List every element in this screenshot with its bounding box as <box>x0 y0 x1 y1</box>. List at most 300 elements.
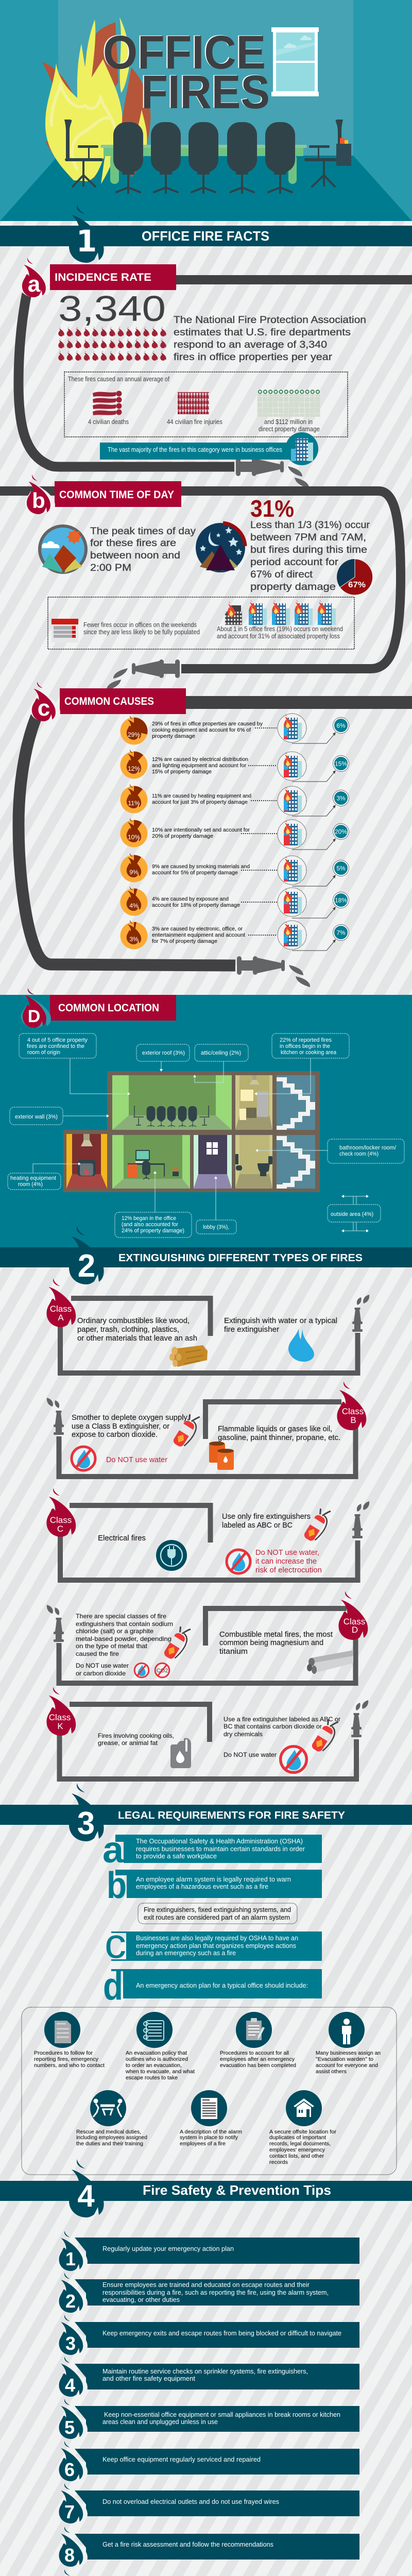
room: stairs lower <box>277 1135 315 1189</box>
room: conference <box>112 1075 232 1130</box>
title: OFFICE FIRES: FIRES <box>140 65 269 118</box>
flame badge class A <box>46 1278 76 1327</box>
room: heating equipment <box>66 1134 107 1189</box>
item: evacuation policy: An evacuation policy that <box>126 2050 187 2056</box>
text: peak times <box>90 526 196 573</box>
item: evacuation policy: escape routes to take <box>126 2075 178 2081</box>
nozzle class C <box>352 1501 369 1538</box>
tip 4: Maintain routine service checks on sprinkler systems, fire extinguishers, <box>102 2368 308 2375</box>
text: night fires: but fires during this time <box>250 545 367 555</box>
tip 3: 3 <box>65 2333 76 2354</box>
callout: outside area: outside area (4%) <box>331 1211 373 1217</box>
item: offsite location: contact lists, and other <box>269 2153 324 2159</box>
text: class B response: Smother to deplete oxygen supply, <box>72 1414 189 1422</box>
item: alarm description: system in place to notify <box>180 2134 238 2141</box>
text: weekend share: and account for 31% of associated property loss <box>217 633 340 640</box>
stat: 31%: 31% <box>250 495 294 522</box>
title: OFFICE FIRES: FIRES <box>141 66 270 118</box>
callout: exterior wall: exterior wall (3%) <box>15 1114 58 1120</box>
text: special extinguishers: caused the fire <box>76 1650 119 1657</box>
text: cooking oils: grease, or animal fat <box>98 1739 158 1747</box>
section number flame 1 <box>69 205 104 263</box>
cause row: exposure 4%: 4% are caused by exposure and <box>152 896 229 902</box>
callout: attic ceiling <box>195 1044 248 1061</box>
callout: outside area <box>328 1205 381 1222</box>
tip 2: responsibilities during a fire, such as reporting the fire, using the alarm system, <box>102 2289 329 2296</box>
item: evacuation warden: assist others <box>316 2069 347 2075</box>
flame badge class K <box>46 1687 76 1736</box>
cause row: electronic 3%: 3% are caused by electronic, office, or <box>152 926 243 932</box>
tip 5 <box>58 2399 359 2439</box>
cause row: electrical 12%: and lighting equipment and account for <box>152 762 247 769</box>
tip 1: Regularly update your emergency action plan <box>102 2245 234 2252</box>
text: class A response <box>224 1317 337 1334</box>
cause row: exposure 4%: 18% <box>335 896 347 904</box>
item: rescue duties: the duties and their training <box>76 2141 143 2147</box>
callout: business offices <box>100 432 318 465</box>
requirement d: An emergency action plan for a typical office should include: <box>136 1982 308 1989</box>
hose c <box>19 706 235 965</box>
tip 1: 1 <box>65 2248 76 2269</box>
panel: common causes <box>19 682 412 987</box>
banner: incidence rate <box>50 264 176 290</box>
item: reporting procedures: reporting fires, emergency <box>34 2056 99 2062</box>
flame badge class D: D <box>352 1625 358 1635</box>
text: night fires: 67% of direct <box>250 569 313 580</box>
flame badge b: b <box>32 488 45 513</box>
trash bin <box>336 138 351 166</box>
item: rescue duties: including employees assigned <box>76 2134 147 2141</box>
flame badge D: D <box>28 1007 40 1026</box>
requirement d: d <box>103 1964 123 2008</box>
text: fewer fires on weekends: since they are less likely to be fully populated <box>83 629 200 636</box>
callout: attic ceiling: attic/ceiling (2%) <box>201 1050 241 1056</box>
cause row: electrical 12%: 15% of property damage <box>152 769 212 775</box>
item: rescue duties <box>76 2090 147 2147</box>
callout: heating equipment room: heating equipment <box>10 1175 56 1181</box>
frame B <box>59 1402 355 1477</box>
icon: no water <box>134 1663 149 1677</box>
cause row: electronic 3%: 7% <box>336 929 346 937</box>
hose b <box>0 491 401 669</box>
icon: injuries grid <box>178 392 209 414</box>
text: class A response: fire extinguisher <box>224 1326 279 1334</box>
text: peak times: between noon and <box>90 550 180 561</box>
building cross-section <box>63 1071 320 1192</box>
requirement c: c <box>105 1920 126 1967</box>
item: alarm description: employees of a fire <box>180 2141 226 2147</box>
requirement b: b <box>107 1865 127 1906</box>
item: evacuation policy <box>125 2012 195 2081</box>
flame icon grid <box>58 327 166 361</box>
text: class B response <box>72 1414 189 1439</box>
banner: common time of day: COMMON TIME OF DAY <box>59 489 174 501</box>
tip 5: Keep non-essential office equipment or small appliances in break rooms or kitchen <box>104 2411 340 2418</box>
dashed note: alarm system: Fire extinguishers, fixed extinguishing systems, and <box>144 1906 291 1913</box>
nozzle class K <box>351 1700 368 1737</box>
cause row: cooking equipment 29%: cooking equipment and account for 6% of <box>152 727 251 733</box>
banner: common location <box>50 995 176 1021</box>
item: reporting procedures <box>34 2012 105 2069</box>
icon: no water <box>281 1747 306 1772</box>
text: special extinguishers: chloride (salt) or a graphite <box>76 1628 153 1635</box>
callout: exterior roof <box>136 1044 190 1061</box>
banner: incidence rate: INCIDENCE RATE <box>55 272 151 283</box>
item: offsite location: A secure offsite location for <box>269 2129 337 2135</box>
icon: barrels <box>209 1442 234 1470</box>
text: NFPA estimate: respond to an average of 3,340 <box>174 340 327 350</box>
cause row: heating 11%: 11% are caused by heating equipment and <box>152 793 251 799</box>
text: do not use water: Do NOT use water <box>224 1751 277 1758</box>
cause row: smoking 9%: 9% are caused by smoking materials and <box>152 863 250 870</box>
icon: extinguisher <box>311 1717 342 1755</box>
callout: lobby <box>196 1220 236 1234</box>
item: evacuation warden: "Evacuation warden" to <box>316 2056 373 2062</box>
cause row: electrical 12% <box>121 750 349 782</box>
flame badge class K: K <box>57 1721 63 1731</box>
dashed note: alarm system: exit routes are considered part of an alarm system <box>144 1913 290 1921</box>
item: evacuation warden <box>316 2012 381 2075</box>
text: peak times: for these fires are <box>90 538 176 549</box>
text: class B materials: Flammable liquids or gases like oil, <box>218 1425 332 1433</box>
flame badge class D: Class <box>344 1617 365 1626</box>
requirement c <box>105 1920 322 1967</box>
section number flame 3: 3 <box>77 1806 95 1841</box>
callout: room of origin <box>19 1033 96 1058</box>
text: night fires: Less than 1/3 (31%) occur <box>250 520 370 531</box>
conference chairs <box>64 120 343 194</box>
panel: incidence rate <box>19 258 412 488</box>
tip 7: Do not overload electrical outlets and do not use frayed wires <box>102 2498 279 2505</box>
requirement a <box>102 1829 322 1871</box>
cause row: intentional 10%: 20% <box>335 828 347 836</box>
callout: office: (and also accounted for <box>122 1222 178 1228</box>
text: do not use water or CO2: or carbon dioxide <box>76 1670 126 1677</box>
cause row: intentional 10%: 10% <box>128 834 140 841</box>
tip 6: Keep office equipment regularly serviced and repaired <box>102 2456 261 2463</box>
panel: common time of day <box>0 474 401 690</box>
room: office <box>112 1135 190 1189</box>
text: special extinguishers: metal-based powder, depending <box>76 1635 171 1642</box>
icon: daytime scene <box>40 526 86 573</box>
panel: class B <box>47 1381 366 1477</box>
text: class A materials <box>77 1317 197 1343</box>
flame badge class B <box>337 1381 366 1430</box>
requirement c: emergency action plan that organizes employee actions <box>136 1942 296 1950</box>
text: night fires: property damage <box>250 582 336 592</box>
flame badge c: c <box>38 696 50 721</box>
requirement b: employees of a hazardous event such as a fire <box>136 1883 268 1890</box>
panel: header office scene <box>0 0 412 221</box>
tip 2: Ensure employees are trained and educated on escape routes and their <box>102 2281 310 2289</box>
text: special extinguishers: on the type of metal that <box>76 1642 148 1650</box>
heading: fire safety tips: Fire Safety & Prevention Tips <box>143 2182 331 2198</box>
text: special extinguishers: extinguishers that contain sodium <box>76 1620 173 1628</box>
section number flame 4 <box>69 2159 104 2217</box>
cause row: heating 11%: 11% <box>128 800 140 807</box>
cause row: cooking equipment 29%: property damage <box>152 733 195 739</box>
banner: common location: COMMON LOCATION <box>58 1002 159 1014</box>
flame badge class C <box>46 1488 76 1537</box>
stat: 3,340: 3,340 <box>58 289 166 329</box>
dotted box: weekends <box>48 597 354 649</box>
tip 3: Keep emergency exits and escape routes from being blocked or difficult to navigate <box>102 2330 341 2337</box>
section number flame 2: 2 <box>78 1248 95 1284</box>
text: class K response: BC that contains carbon dioxide or <box>224 1723 322 1730</box>
cause row: cooking equipment 29%: 29% <box>128 731 140 738</box>
text: class B response: use a Class B extinguisher, or <box>72 1422 169 1431</box>
cause row: electronic 3%: entertainment equipment and account <box>152 932 245 938</box>
cause row: electronic 3%: 3% <box>129 936 139 943</box>
item: offsite location: employees' emergency <box>269 2147 325 2153</box>
item: evacuation policy: when to evacuate, and what <box>125 2069 195 2075</box>
section number flame 1: 1 <box>76 224 97 259</box>
flame badge D <box>21 988 51 1028</box>
room: bathroom <box>235 1135 272 1189</box>
text: class B response: expose to carbon dioxide. <box>72 1431 158 1439</box>
cause row: exposure 4% <box>121 887 349 918</box>
text: night fires <box>250 520 370 592</box>
icon: night scene <box>196 523 245 572</box>
tip 9 <box>58 2569 359 2576</box>
text: class C response <box>222 1513 311 1530</box>
cause row: exposure 4%: account for 18% of property damage <box>152 902 240 908</box>
item: reporting procedures: numbers, and who to contact <box>34 2062 105 2069</box>
text: class A materials: Ordinary combustibles like wood, <box>77 1317 190 1325</box>
frame C <box>60 1505 357 1580</box>
warning: electrocution: risk of electrocution <box>255 1566 322 1574</box>
item: offsite location: records <box>269 2159 288 2165</box>
callout: room of origin: fires are confined to the <box>27 1043 84 1049</box>
nozzle class B <box>47 1398 64 1435</box>
icon: extinguisher <box>172 1412 203 1450</box>
item: rescue duties: Rescue and medical duties, <box>76 2129 141 2135</box>
stat labels: and $112 million in <box>264 418 313 426</box>
section number flame 4: 4 <box>77 2179 95 2213</box>
icon: extinguisher <box>303 1506 334 1544</box>
nozzle class A <box>352 1295 369 1332</box>
warning: electrocution: it can increase the <box>255 1557 317 1566</box>
stat labels: 44 civilian fire injuries <box>167 418 222 426</box>
text: class D materials: common being magnesium and <box>219 1639 323 1647</box>
cause row: cooking equipment 29%: 29% of fires in office properties are caused by <box>152 721 263 727</box>
flame badge class C: C <box>57 1524 63 1534</box>
flame badge class B: B <box>350 1415 356 1425</box>
cause row: smoking 9%: 5% <box>336 865 346 872</box>
icon: water drop <box>288 1329 314 1362</box>
callout: office: 12% began in the office <box>122 1215 176 1222</box>
dashed note: alarm system <box>138 1903 297 1924</box>
icon: logs <box>169 1345 208 1367</box>
callout: lobby: lobby (3%), <box>203 1224 229 1230</box>
icon: no water <box>72 1447 95 1470</box>
banner: common causes: COMMON CAUSES <box>64 696 154 707</box>
pie chart: 67%: 67% <box>348 581 366 589</box>
section band 1: office fire facts <box>0 205 412 263</box>
item: account for employees: evacuation has been completed <box>220 2062 296 2069</box>
requirement a: requires businesses to maintain certain standards in order <box>136 1845 305 1853</box>
flame badge a <box>20 258 50 297</box>
heading: office fire facts: OFFICE FIRE FACTS <box>142 228 269 244</box>
warning: do not use water: Do NOT use water <box>106 1456 167 1464</box>
tip 8: Get a fire risk assessment and follow the recommendations <box>102 2541 273 2548</box>
callout: kitchen <box>272 1033 349 1058</box>
text: class A materials: or other materials that leave an ash <box>77 1334 197 1343</box>
flame badge class B: Class <box>342 1406 364 1416</box>
tip 4: and other fire safety equipment <box>102 2375 196 2382</box>
item: evacuation warden: Many businesses assign an <box>316 2050 381 2056</box>
nozzle a <box>236 457 309 488</box>
text: class A response: Extinguish with water or a typical <box>224 1317 337 1325</box>
tip 8 <box>58 2527 359 2567</box>
text: night fires: between 7PM and 7AM, <box>250 532 366 543</box>
warning: electrocution: Do NOT use water, <box>255 1549 319 1557</box>
tip 2: 2 <box>65 2291 76 2312</box>
callout: bathroom: check room (4%) <box>339 1151 379 1157</box>
pie chart: 67% <box>337 559 373 595</box>
icon: no water <box>227 1550 250 1573</box>
text: electrical fires: Electrical fires <box>98 1534 146 1543</box>
text: fewer fires on weekends <box>83 621 200 636</box>
tip 4: 4 <box>65 2375 75 2396</box>
text: class K response: dry chemicals <box>224 1731 263 1738</box>
cause row: smoking 9% <box>121 853 349 886</box>
panel: common location <box>0 988 412 1247</box>
requirement a: The Occupational Safety & Health Administration (OSHA) <box>136 1838 303 1845</box>
room: lobby <box>194 1135 232 1189</box>
cause row: heating 11%: 3% <box>336 794 346 802</box>
dotted box: annual averages: These fires caused an annual average of <box>68 376 169 383</box>
callout: office: 24% of property damage) <box>122 1228 184 1234</box>
cause row: heating 11% <box>121 784 349 816</box>
text: fewer fires on weekends: Fewer fires occur in offices on the weekends <box>83 621 197 629</box>
text: class D materials: titanium <box>219 1648 248 1656</box>
item: evacuation warden: account for everyone and <box>316 2062 378 2069</box>
section band 3: legal requirements <box>0 1783 412 1841</box>
item: offsite location: records, legal documents, <box>269 2141 331 2147</box>
icon: extinguisher <box>163 1624 194 1662</box>
tip 2 <box>58 2273 359 2313</box>
text: class K response: Use a fire extinguisher labeled as ABC or <box>224 1716 340 1723</box>
text: do not use water or CO2 <box>76 1662 129 1677</box>
tip 1 <box>58 2231 359 2271</box>
cause row: electrical 12%: 15% <box>335 760 347 768</box>
tip 7: 7 <box>64 2501 75 2522</box>
text: class B materials: gasoline, paint thinner, propane, etc. <box>218 1434 340 1442</box>
banner: common causes <box>60 688 186 714</box>
tip 4 <box>58 2357 359 2397</box>
frame A <box>60 1298 357 1373</box>
callout: bathroom <box>328 1139 404 1163</box>
text: cooking oils <box>98 1732 174 1747</box>
item: reporting procedures: Procedures to follow for <box>34 2050 93 2056</box>
icon: oil jug <box>170 1738 191 1768</box>
cause row: cooking equipment 29% <box>121 714 349 745</box>
dotted box: annual averages <box>64 372 348 437</box>
text: peak times: 2:00 PM <box>90 563 131 573</box>
text: NFPA estimate <box>174 315 366 363</box>
item: alarm description <box>180 2090 242 2147</box>
heading: legal requirements: LEGAL REQUIREMENTS FOR FIRE SAFETY <box>118 1810 346 1821</box>
tip 5: areas clean and unplugged unless in use <box>102 2418 218 2426</box>
text: class C response: Use only fire extinguishers <box>222 1513 311 1521</box>
section number flame 2 <box>69 1226 104 1284</box>
section number flame 3 <box>69 1783 104 1841</box>
panel: legal requirements list <box>102 1829 322 2008</box>
icon: five burning buildings <box>225 600 336 625</box>
cause row: electronic 3%: for 7% of property damage <box>152 938 217 944</box>
cause row: electronic 3% <box>121 920 349 951</box>
icon: no CO2: CO2 <box>157 1668 168 1674</box>
callout: bathroom: bathroom/locker room/ <box>339 1145 397 1151</box>
cause row: exposure 4%: 4% <box>129 902 139 909</box>
nozzle class D <box>47 1605 64 1642</box>
callout: exterior wall <box>10 1107 63 1125</box>
cause row: intentional 10% <box>121 818 349 850</box>
fire flames <box>42 17 150 184</box>
title: OFFICE FIRES: OFFICE <box>103 26 266 79</box>
requirement c: during an emergency such as a fire <box>136 1950 236 1957</box>
nozzle c <box>237 956 310 987</box>
cause row: cooking equipment 29%: 6% <box>336 722 346 730</box>
tip 6: 6 <box>64 2459 75 2480</box>
text: special extinguishers <box>76 1613 173 1657</box>
requirement b <box>107 1865 322 1906</box>
callouts and leader arrows <box>33 1058 369 1232</box>
text: class B materials <box>218 1425 340 1442</box>
text: weekend share <box>217 625 343 640</box>
room: stairs upper <box>277 1075 315 1130</box>
room: kitchen <box>235 1075 272 1130</box>
panel: class C <box>46 1488 369 1580</box>
requirement a: to provide a safe workplace <box>136 1853 217 1860</box>
callout: heating equipment room <box>8 1173 61 1190</box>
flame badge class A: Class <box>50 1304 72 1314</box>
cause row: electrical 12%: 12% are caused by electrical distribution <box>152 756 248 762</box>
requirement b: An employee alarm system is legally required to warn <box>136 1876 291 1883</box>
flame badge class C: Class <box>50 1515 72 1525</box>
cause row: smoking 9%: account for 5% of property damage <box>152 870 238 876</box>
flame badge b <box>25 474 55 514</box>
hose a <box>19 294 234 467</box>
item: account for employees: Procedures to account for all <box>220 2050 289 2056</box>
text: do not use water or CO2: Do NOT use water <box>76 1662 129 1669</box>
flame badge class A: A <box>58 1313 64 1323</box>
nozzle b <box>107 659 180 690</box>
section band 2: extinguishing <box>0 1226 412 1284</box>
item: evacuation policy: to order an evacuation, <box>126 2062 182 2069</box>
frame D <box>59 1608 355 1683</box>
text: class K response <box>224 1716 340 1738</box>
banner: common time of day <box>55 481 181 507</box>
text: NFPA estimate: estimates that U.S. fire departments <box>174 327 351 338</box>
panel: class D <box>47 1591 368 1683</box>
item: alarm description: A description of the alarm <box>180 2129 242 2135</box>
item: account for employees: employees after an emergency <box>220 2056 295 2062</box>
icon: calendar <box>52 619 78 642</box>
text: class C response: labeled as ABC or BC <box>222 1521 293 1530</box>
callout: kitchen: 22% of reported fires <box>280 1037 332 1043</box>
panel: class A <box>46 1278 369 1373</box>
text: NFPA estimate: fires in office properties per year <box>174 352 333 363</box>
panel: emergency action plan items <box>22 2007 397 2175</box>
callout: office <box>115 1212 192 1238</box>
cause row: intentional 10%: 20% of property damage <box>152 833 213 839</box>
callout: room of origin: room of origin <box>27 1049 60 1056</box>
conference table <box>100 145 307 184</box>
flame badge class K: Class <box>49 1713 71 1722</box>
stat labels: direct property damage <box>259 426 320 433</box>
